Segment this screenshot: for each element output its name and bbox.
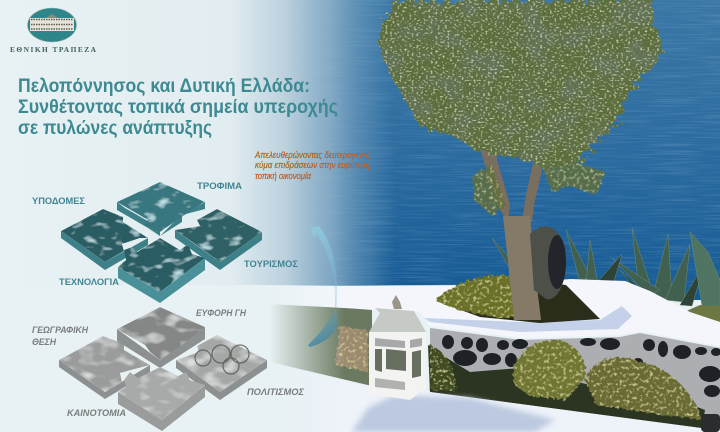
tile: geography [59, 336, 150, 399]
bank logo [10, 8, 97, 54]
tile: fertile land [117, 307, 205, 368]
lantern top lattice [375, 338, 422, 348]
agave plants [492, 228, 720, 306]
sea [230, 0, 720, 300]
curved arrow [308, 226, 338, 347]
title: Πελοπόννησος και Δυτική Ελλάδα: [18, 75, 310, 97]
tile: tourism [175, 209, 262, 270]
tile: culture [176, 335, 267, 400]
pillar labels: grey: ΠΟΛΙΤΙΣΜΟΣ [247, 387, 305, 397]
tyre on trunk [530, 226, 566, 299]
teal puzzle: growth pillars [61, 182, 262, 303]
pillar labels: teal [32, 181, 299, 287]
logo wordmark: ΕΘΝΙΚΗ ΤΡΑΠΕΖΑ [10, 45, 97, 54]
olive tree foliage [378, 0, 662, 168]
lantern lower lattice [375, 378, 405, 390]
pillar labels: teal: ΤΕΧΝΟΛΟΓΙΑ [59, 277, 120, 287]
planter shrubs [436, 275, 514, 318]
logo emblem [28, 8, 76, 42]
lantern finial [392, 295, 402, 309]
pillar labels: teal: ΤΡΟΦΙΜΑ [197, 181, 243, 191]
orange callout text [254, 150, 371, 181]
grey puzzle: regional advantages [59, 307, 267, 431]
floor shadow [352, 395, 555, 432]
title: Συνθέτοντας τοπικά σημεία υπεροχής [18, 96, 338, 118]
terrace floor [230, 360, 720, 432]
lower tree branches [472, 162, 605, 216]
title [18, 75, 338, 139]
dark object at lower corner [701, 414, 720, 432]
wall cap shadow [424, 306, 632, 332]
lower fade panel [0, 285, 345, 432]
orange callout text: Απελευθερώνοντας δευτερογενές [254, 150, 371, 160]
title: σε πυλώνες ανάπτυξης [18, 117, 212, 139]
tile: food [117, 182, 205, 236]
right olive shrub behind wall [684, 305, 720, 322]
lantern [369, 295, 426, 400]
tree trunks [476, 135, 546, 320]
lantern roof [369, 308, 426, 332]
tile: innovation [118, 367, 205, 431]
pillar labels: grey: ΚΑΙΝΟΤΟΜΙΑ [67, 408, 126, 418]
wall shrubs [430, 340, 702, 420]
orange callout text: κύμα επιδράσεων στην ευρύτερη [255, 160, 370, 170]
pillar labels: grey: ΘΕΣΗ [32, 337, 56, 347]
pillar labels: grey: ΓΕΩΓΡΑΦΙΚΗ [32, 325, 88, 335]
garden behind wall [270, 302, 372, 386]
sea ripples [230, 0, 720, 290]
olympic rings [195, 345, 249, 374]
lantern glass [375, 349, 421, 378]
dark stones [442, 335, 720, 397]
left fade panel [0, 0, 395, 286]
tile: technology [118, 238, 205, 303]
orange callout text: τοπική οικονομία [255, 171, 312, 181]
lantern body [369, 332, 426, 400]
stone wall [430, 328, 720, 428]
background photo: sea and terrace [230, 0, 720, 432]
flowers behind lantern [335, 326, 368, 372]
pillar labels: grey: ΕΥΦΟΡΗ ΓΗ [196, 308, 246, 318]
pillar labels: grey [32, 308, 305, 418]
planter bed [436, 278, 600, 323]
dark base of wall [428, 345, 705, 428]
white terrace wall cap [230, 279, 720, 346]
pillar labels: teal: ΥΠΟΔΟΜΕΣ [32, 196, 86, 206]
tile: infrastructure [61, 209, 148, 270]
pillar labels: teal: ΤΟΥΡΙΣΜΟΣ [244, 259, 299, 269]
